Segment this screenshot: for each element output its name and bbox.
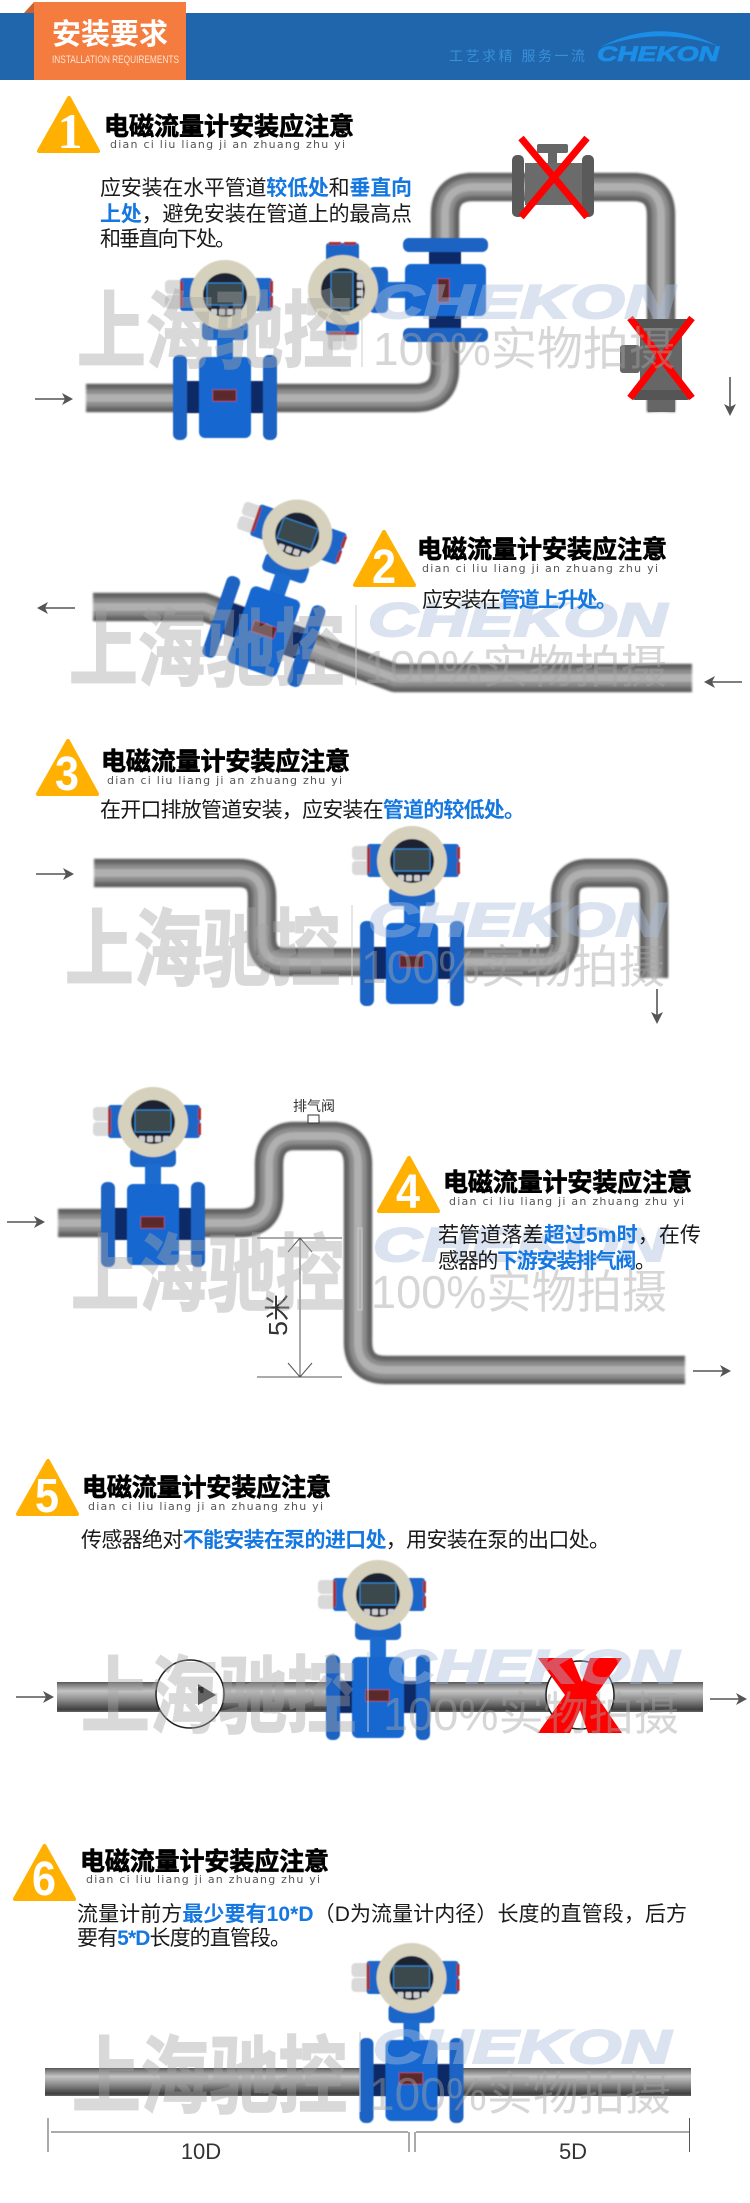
watermark: 上海驰控	[69, 604, 344, 697]
watermark: 上海驰控	[81, 1651, 356, 1744]
flow meter tilted	[193, 482, 358, 689]
section 3	[36, 741, 667, 1024]
pinyin: dian ci liu liang ji an zhuang zhu yi	[107, 774, 342, 787]
pinyin: dian ci liu liang ji an zhuang zhu yi	[110, 138, 345, 151]
watermark	[71, 1218, 669, 1322]
watermark: 100%实物拍摄	[364, 641, 667, 693]
heading: 电磁流量计安装应注意	[417, 535, 667, 564]
watermark: 100%实物拍摄	[361, 941, 665, 993]
logo	[597, 31, 720, 66]
watermark: CHEKON	[368, 593, 669, 646]
flow meter on riser	[308, 238, 488, 350]
pipe run	[86, 187, 661, 412]
heading: 电磁流量计安装应注意	[101, 747, 350, 776]
number badge 2: 2	[372, 541, 396, 594]
pipe	[57, 1682, 703, 1712]
watermark: 上海驰控	[77, 286, 352, 379]
body text: 流量计前方最少要有10*D（D为流量计内径）长度的直管段，后方	[77, 1903, 687, 1926]
heading: 电磁流量计安装应注意	[82, 1473, 331, 1502]
sloped pipe	[93, 607, 692, 678]
arrow in	[16, 1691, 54, 1703]
number badge 1	[39, 98, 98, 159]
body text: 要有5*D长度的直管段。	[77, 1927, 291, 1950]
watermark: CHEKON	[373, 1218, 669, 1271]
body text: 感器的下游安装排气阀。	[438, 1250, 656, 1273]
vent valve label: 排气阀	[293, 1098, 335, 1114]
arrow down	[651, 989, 663, 1024]
watermark: 上海驰控	[65, 904, 340, 997]
pinyin: dian ci liu liang ji an zhuang zhu yi	[449, 1195, 684, 1208]
header banner	[0, 2, 750, 80]
watermark	[72, 2020, 673, 2124]
logo: CHEKON	[597, 43, 720, 66]
watermark: CHEKON	[387, 1640, 680, 1693]
pinyin: dian ci liu liang ji an zhuang zhu yi	[86, 1873, 320, 1886]
flow meter horizontal	[165, 260, 277, 440]
number badge 3: 3	[55, 748, 79, 801]
watermark: 100%实物拍摄	[383, 1688, 679, 1740]
section 1	[35, 98, 736, 440]
pipe	[45, 2068, 691, 2096]
pipe run	[58, 1136, 685, 1370]
watermark	[65, 893, 667, 997]
watermark: CHEKON	[368, 893, 667, 946]
body text: 应安装在水平管道较低处和垂直向	[100, 176, 412, 200]
body text	[438, 1224, 701, 1273]
body text	[100, 176, 412, 251]
5D label: 5D	[559, 2139, 587, 2164]
section 5	[16, 1461, 747, 1744]
body text	[77, 1903, 687, 1950]
number badge 3	[38, 741, 97, 801]
watermark	[69, 593, 669, 697]
orange title tab	[34, 2, 186, 80]
pump outlet circle with cross	[538, 1658, 622, 1733]
body text: 传感器绝对不能安装在泵的进口处，用安装在泵的出口处。	[81, 1529, 610, 1552]
title: 安装要求	[52, 18, 168, 51]
body text: 上处，避免安装在管道上的最高点	[100, 203, 412, 226]
number badge 6: 6	[32, 1853, 56, 1906]
subtitle: INSTALLATION REQUIREMENTS	[52, 54, 179, 66]
watermark: CHEKON	[373, 275, 677, 328]
section 6	[15, 1846, 691, 2164]
section 4	[7, 1087, 731, 1377]
length dimension	[48, 2118, 690, 2164]
number badge 6	[15, 1846, 74, 1906]
number badge 4: 4	[396, 1166, 420, 1219]
flow meter	[318, 1560, 430, 1740]
pinyin: dian ci liu liang ji an zhuang zhu yi	[422, 562, 658, 575]
body text: 应安装在管道上升处。	[422, 589, 617, 612]
section 2	[37, 482, 742, 697]
number badge 5	[18, 1461, 77, 1523]
slogan: 工艺求精 服务一流	[449, 48, 585, 64]
arrow out	[693, 1365, 731, 1377]
vent valve box	[308, 1115, 319, 1123]
arrow in	[35, 393, 73, 405]
flow meter	[352, 826, 464, 1006]
5 metre dimension: 5米	[263, 1294, 293, 1336]
watermark: CHEKON	[373, 2020, 673, 2073]
body text: 和垂直向下处。	[100, 228, 236, 251]
body text: 若管道落差超过5m时，在传	[438, 1224, 701, 1247]
heading: 电磁流量计安装应注意	[104, 112, 354, 141]
number badge 2	[355, 532, 414, 594]
number badge 1: 1	[58, 103, 82, 159]
5 metre dimension	[257, 1238, 342, 1377]
watermark	[81, 1640, 680, 1744]
10D label: 10D	[181, 2139, 221, 2164]
pipe run	[94, 873, 654, 978]
watermark: 100%实物拍摄	[371, 1266, 667, 1318]
arrow out	[724, 377, 736, 416]
arrow out	[710, 1693, 747, 1705]
incorrect top meter	[512, 138, 594, 217]
body text: 在开口排放管道安装，应安装在管道的较低处。	[100, 798, 525, 822]
watermark: 上海驰控	[71, 1229, 344, 1322]
watermark	[77, 275, 677, 379]
number badge 4	[379, 1158, 438, 1219]
incorrect lower meter	[620, 318, 692, 412]
watermark: 100%实物拍摄	[373, 323, 675, 375]
flow meter	[93, 1087, 205, 1267]
pinyin: dian ci liu liang ji an zhuang zhu yi	[88, 1500, 323, 1513]
heading: 电磁流量计安装应注意	[80, 1847, 329, 1876]
arrow in	[7, 1216, 45, 1228]
watermark: 上海驰控	[72, 2031, 347, 2124]
heading: 电磁流量计安装应注意	[443, 1168, 692, 1197]
pump inlet circle	[156, 1660, 224, 1728]
arrow outlet	[37, 602, 75, 614]
flow meter	[352, 1943, 464, 2123]
watermark: 100%实物拍摄	[369, 2068, 671, 2120]
arrow inlet	[704, 676, 742, 688]
number badge 5: 5	[35, 1470, 59, 1523]
arrow in	[36, 868, 74, 880]
